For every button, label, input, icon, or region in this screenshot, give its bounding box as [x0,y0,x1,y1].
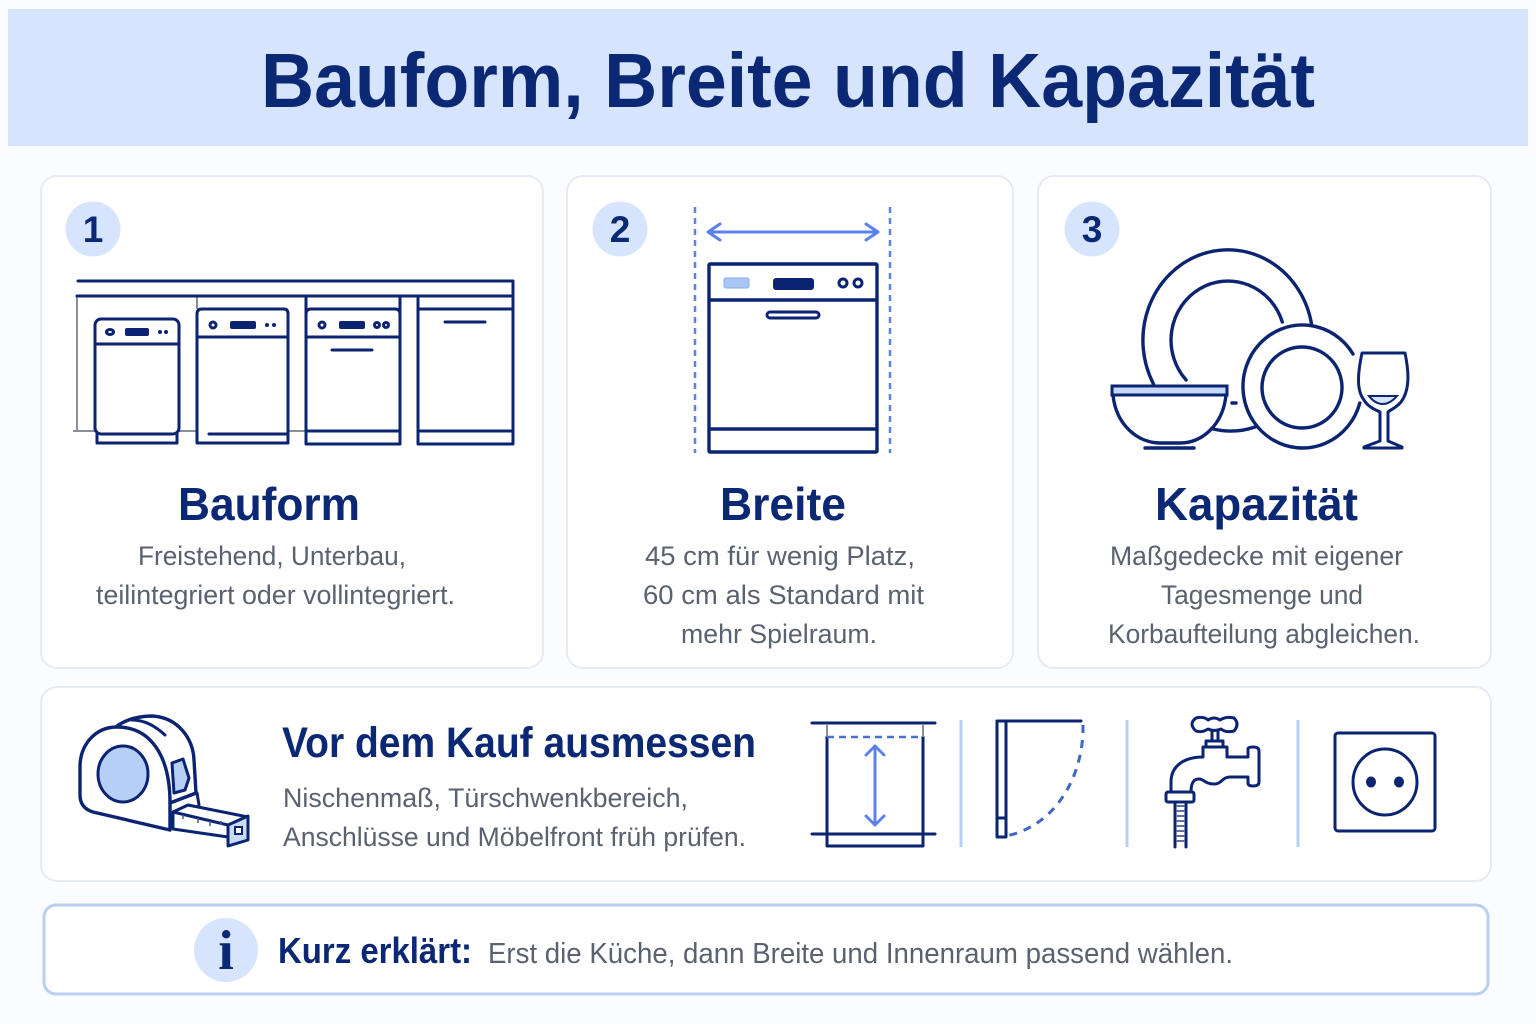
number badge 2 [592,202,648,256]
heading: Vor dem Kauf ausmessen: Vor dem Kauf ausmessen [282,719,756,767]
heading: Kapazität: Kapazität [1155,478,1358,530]
number badge 3 [1064,202,1120,256]
callout text: Erst die Küche, dann Breite und Innenraum passend wählen. [488,938,1233,970]
description: Kapazität: Korbaufteilung abgleichen. [1108,619,1420,649]
title: Bauform, Breite und Kapazität [261,38,1315,124]
description: Kapazität: Tagesmenge und [1161,580,1363,610]
description: Kapazität [1108,541,1420,649]
description: Breite: 60 cm als Standard mit [643,580,924,610]
heading: Breite: Breite [720,478,846,530]
number badge 1 [66,202,120,256]
heading: Bauform: Bauform [178,478,360,530]
icon: dishwasher with width arrow [695,207,890,453]
description: Bauform [96,541,455,610]
icon: power socket [1335,733,1435,831]
panel: Bauform [41,176,543,668]
title banner [8,9,1528,146]
description: measuring hints: Anschlüsse und Möbelfront früh prüfen. [283,822,746,852]
number badge 3: 3 [1082,209,1102,250]
icon: water tap [1166,717,1259,847]
panel: Breite [567,176,1013,668]
icon: door swing [997,721,1083,837]
number badge 1: 1 [83,209,103,250]
callout: Kurz erklärt [44,905,1488,994]
icon: niche measurement [812,723,935,846]
description: Breite: 45 cm für wenig Platz, [645,541,915,571]
callout label: Kurz erklärt: [278,930,472,971]
description: measuring hints: Nischenmaß, Türschwenkbereich, [283,783,688,813]
number badge 2: 2 [610,209,630,250]
icon: tape measure [80,716,248,846]
panel: Kapazität [1038,176,1491,668]
description: Breite [643,541,924,649]
description: Bauform: Freistehend, Unterbau, [138,541,406,571]
icon: info [194,918,258,982]
description: measuring hints [283,783,746,852]
description: Breite: mehr Spielraum. [681,619,877,649]
icon: plates, bowl and wine glass [1112,250,1408,448]
panel: Vor dem Kauf ausmessen [41,687,1491,881]
icon: info: i [218,920,234,982]
description: Kapazität: Maßgedecke mit eigener [1110,541,1403,571]
description: Bauform: teilintegriert oder vollintegriert. [96,580,455,610]
icon: four dishwasher installation types [73,281,513,444]
